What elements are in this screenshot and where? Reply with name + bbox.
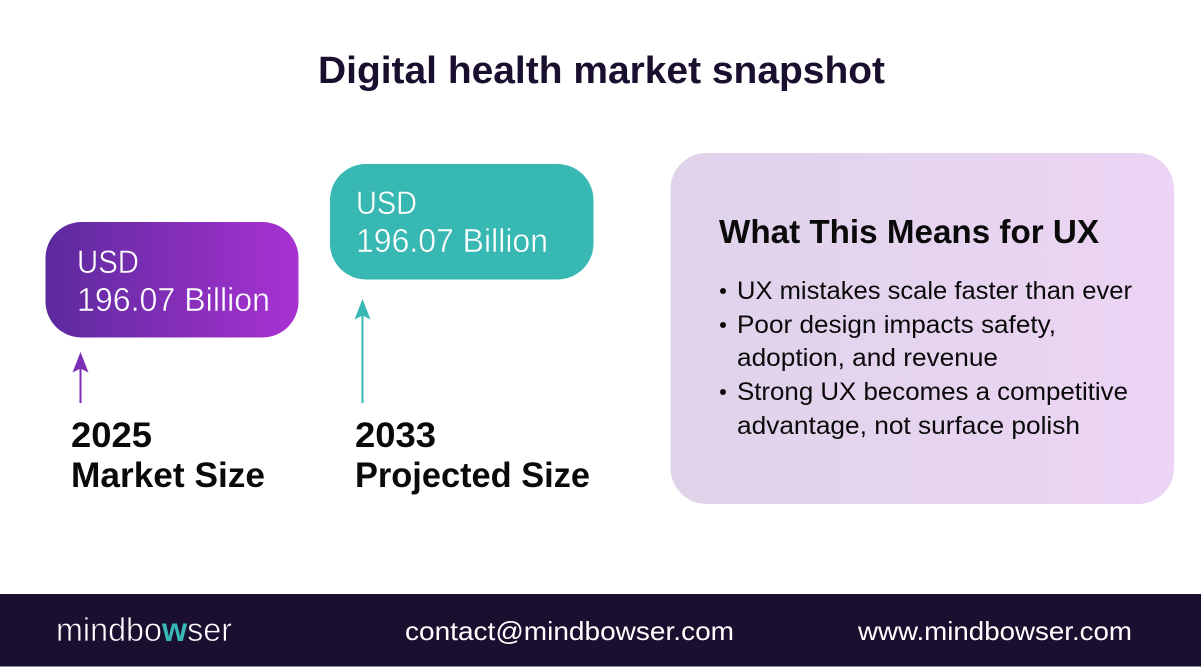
arrow: 2033 bbox=[354, 299, 370, 403]
panel: 2033 value: 196.07 Billion bbox=[356, 222, 548, 259]
label: 2025 market size: 2025 bbox=[71, 416, 152, 455]
panel: 2025 value: USD bbox=[77, 244, 139, 280]
bullet list: Strong UX becomes a competitive bbox=[737, 378, 1128, 406]
bullet list: advantage, not surface polish bbox=[737, 412, 1080, 440]
panel: 2025 value bbox=[46, 222, 298, 338]
contact email: contact@mindbowser.com bbox=[405, 616, 734, 646]
panel: 2025 value: 196.07 Billion bbox=[77, 281, 270, 318]
label: 2025 market size bbox=[71, 416, 265, 495]
arrow: 2025 bbox=[72, 352, 88, 403]
bullet list: Poor design impacts safety, bbox=[737, 311, 1056, 339]
logo: mindbowser: mindbowser bbox=[56, 611, 232, 648]
label: 2033 projected size: Projected Size bbox=[355, 456, 590, 495]
title: Digital health market snapshot bbox=[318, 50, 885, 92]
bullet list: adoption, and revenue bbox=[737, 344, 998, 372]
panel: 2033 value bbox=[330, 164, 594, 280]
heading: What This Means for UX bbox=[719, 213, 1099, 250]
footer bar bbox=[0, 594, 1201, 666]
bullet list bbox=[720, 277, 1132, 440]
label: 2033 projected size: 2033 bbox=[355, 416, 436, 455]
panel: what this means for UX bbox=[670, 153, 1174, 504]
website: www.mindbowser.com bbox=[857, 616, 1132, 646]
bullet list: UX mistakes scale faster than ever bbox=[737, 277, 1132, 305]
panel: 2033 value: USD bbox=[356, 185, 417, 221]
label: 2033 projected size bbox=[355, 416, 590, 495]
label: 2025 market size: Market Size bbox=[71, 456, 265, 495]
